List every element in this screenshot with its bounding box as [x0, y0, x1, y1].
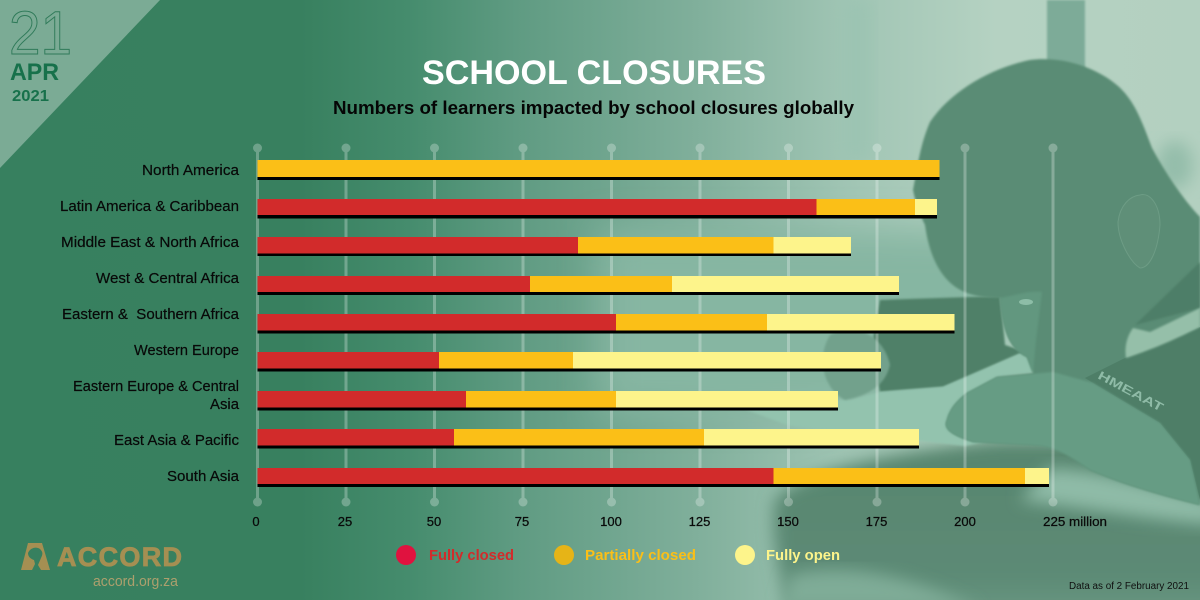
background photo: student writing: HMEAAT — [1096, 368, 1167, 415]
x axis labels: 0 — [252, 514, 260, 529]
date: year: 2021 — [12, 88, 49, 105]
url: accord.org.za — [93, 573, 179, 590]
x axis labels: 75 — [515, 514, 529, 529]
x axis labels: 225 million — [1043, 514, 1107, 529]
legend: fully open: Fully open — [766, 547, 840, 564]
chart gridlines — [253, 144, 1058, 506]
row: East Asia & Pacific: East Asia & Pacific — [114, 433, 239, 449]
row: South Asia — [167, 468, 1049, 487]
date corner triangle — [0, 0, 160, 168]
x axis labels: 50 — [427, 514, 441, 529]
row: South Asia: South Asia — [167, 469, 240, 485]
row: Eastern & Southern Africa — [62, 307, 954, 334]
bar chart — [60, 160, 1049, 487]
wordmark: ACCORD — [57, 542, 182, 572]
x axis labels — [252, 514, 1107, 529]
source note: Data as of 2 February 2021 — [1069, 581, 1189, 592]
row: Middle East & North Africa: Middle East & North Africa — [61, 235, 240, 251]
legend: partially closed — [554, 545, 696, 565]
x axis labels: 150 — [777, 514, 799, 529]
x axis labels: 175 — [866, 514, 887, 529]
row: Eastern Europe & Central Asia: Asia — [210, 397, 240, 413]
logo: ACCORD — [21, 542, 182, 590]
legend: fully closed: Fully closed — [429, 547, 514, 564]
x axis labels: 200 — [954, 514, 976, 529]
row: Middle East & North Africa — [61, 235, 851, 256]
icon: Africa emblem — [21, 543, 50, 570]
legend: fully closed — [396, 545, 514, 565]
x axis labels: 25 — [338, 514, 352, 529]
row: Latin America & Caribbean: Latin America & Caribbean — [60, 199, 239, 215]
row: North America — [142, 160, 940, 180]
legend: fully open — [735, 545, 840, 565]
subtitle: Numbers of learners impacted by school closures globally — [333, 98, 854, 118]
row: North America: North America — [142, 163, 240, 179]
row: Eastern Europe & Central Asia — [73, 379, 838, 413]
row: Western Europe — [134, 343, 881, 372]
row: Eastern Europe & Central Asia: Eastern Europe & Central — [73, 379, 239, 395]
row: Western Europe: Western Europe — [134, 343, 239, 359]
x axis labels: 125 — [689, 514, 710, 529]
row: Eastern & Southern Africa: Eastern & Southern Africa — [62, 307, 240, 323]
row: West & Central Africa: West & Central Africa — [96, 271, 240, 287]
row: East Asia & Pacific — [114, 429, 919, 449]
row: West & Central Africa — [96, 271, 899, 295]
row: Latin America & Caribbean — [60, 199, 937, 218]
x axis labels: 100 — [600, 514, 622, 529]
date: day number: 21 — [9, 0, 72, 67]
title: SCHOOL CLOSURES — [422, 54, 766, 92]
date: month: APR — [10, 59, 59, 86]
legend: partially closed: Partially closed — [585, 547, 696, 564]
legend — [396, 545, 840, 565]
